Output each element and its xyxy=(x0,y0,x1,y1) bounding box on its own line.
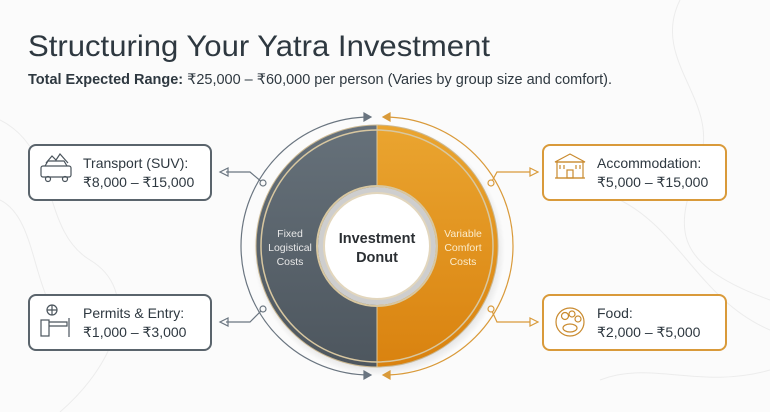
card: accommodation xyxy=(543,145,726,200)
card: permits: Permits & Entry: xyxy=(83,305,184,321)
icon: building xyxy=(555,154,585,178)
donut chart: Costs xyxy=(450,256,476,268)
donut chart: Comfort xyxy=(444,242,482,254)
card: food xyxy=(543,295,726,350)
subtitle: Total Expected Range: ₹25,000 – ₹60,000 per person (Varies by group size and comfort). xyxy=(28,72,612,88)
center label: Investment xyxy=(339,231,415,247)
card: transport: Transport (SUV): xyxy=(83,155,188,171)
card: food: ₹2,000 – ₹5,000 xyxy=(597,324,701,340)
icon: thali xyxy=(556,308,584,336)
title: Structuring Your Yatra Investment xyxy=(28,30,491,63)
card: accommodation: Accommodation: xyxy=(597,155,701,171)
donut chart: Logistical xyxy=(268,242,312,254)
donut chart: Costs xyxy=(277,256,303,268)
donut chart xyxy=(253,124,505,376)
icon: suv xyxy=(41,154,71,182)
donut chart: Donut xyxy=(356,250,398,266)
label: variable: Variable xyxy=(444,228,482,240)
label: fixed: Fixed xyxy=(277,228,303,240)
connectors xyxy=(220,168,538,326)
card: transport xyxy=(29,145,211,200)
outer ring arrows xyxy=(241,113,513,379)
segment: variable comfort costs xyxy=(377,125,498,367)
segment: fixed logistical costs xyxy=(256,125,377,367)
card: permits: ₹1,000 – ₹3,000 xyxy=(83,324,187,340)
card: transport: ₹8,000 – ₹15,000 xyxy=(83,174,194,190)
icon: barrier xyxy=(41,305,69,337)
card: accommodation: ₹5,000 – ₹15,000 xyxy=(597,174,708,190)
card: food: Food: xyxy=(597,305,633,321)
card: permits xyxy=(29,295,211,350)
